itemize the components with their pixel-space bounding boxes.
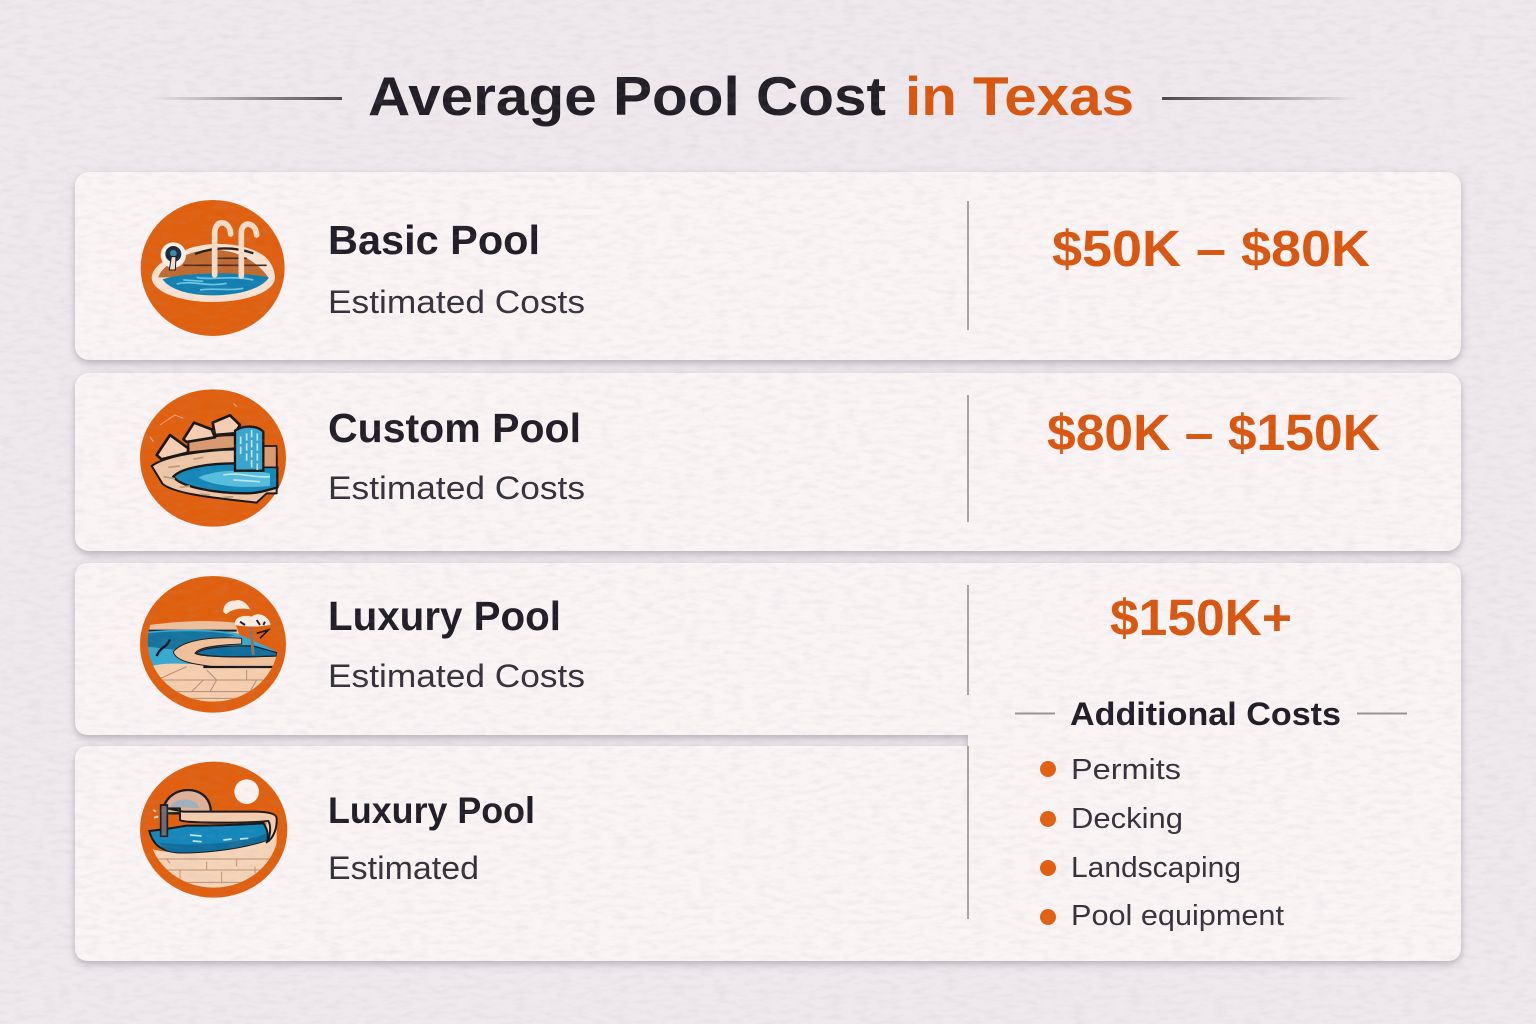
title text: Average Pool Cost (368, 65, 886, 127)
panel: luxury pools and additional costs (75, 563, 1461, 961)
basic pool subtext: Estimated Costs (328, 284, 585, 320)
bullet (1040, 761, 1056, 777)
bullet (1040, 909, 1056, 925)
luxury pool price: $150K+ (1110, 589, 1292, 646)
icon: luxury pool (140, 576, 287, 713)
bullet (1040, 811, 1056, 827)
card background with notch between luxury rows (75, 563, 1461, 961)
title rule right (1162, 97, 1360, 100)
divider upper (967, 585, 969, 695)
divider (967, 395, 969, 522)
title accent text: in Texas (905, 65, 1134, 127)
list item: Decking (1071, 803, 1183, 835)
list item: Pool equipment (1071, 900, 1284, 932)
additional costs rule left (1015, 712, 1055, 714)
list item: Landscaping (1071, 852, 1241, 884)
custom pool price: $80K – $150K (1047, 404, 1380, 461)
panel: basic pool (75, 172, 1461, 360)
list item: Permits (1071, 754, 1181, 786)
card background (75, 373, 1461, 551)
panel: custom pool (75, 373, 1461, 551)
additional costs rule right (1357, 712, 1407, 714)
basic pool heading: Basic Pool (328, 217, 540, 263)
luxury pool second heading: Luxury Pool (328, 790, 535, 831)
icon: custom pool (140, 389, 286, 527)
luxury pool heading: Luxury Pool (328, 593, 561, 639)
additional costs heading: Additional Costs (1070, 696, 1341, 732)
custom pool subtext: Estimated Costs (328, 470, 585, 506)
icon: luxury pool with spa (140, 762, 287, 898)
additional costs block (1015, 696, 1407, 932)
divider (967, 201, 969, 330)
title (150, 65, 1360, 127)
luxury pool subtext: Estimated Costs (328, 658, 585, 694)
custom pool heading: Custom Pool (328, 405, 581, 451)
luxury pool second subtext: Estimated (328, 850, 479, 886)
icon: basic pool (141, 200, 285, 336)
basic pool price: $50K – $80K (1052, 220, 1370, 277)
divider lower (967, 746, 969, 919)
title rule left (150, 97, 342, 100)
card background (75, 172, 1461, 360)
bullet (1040, 860, 1056, 876)
